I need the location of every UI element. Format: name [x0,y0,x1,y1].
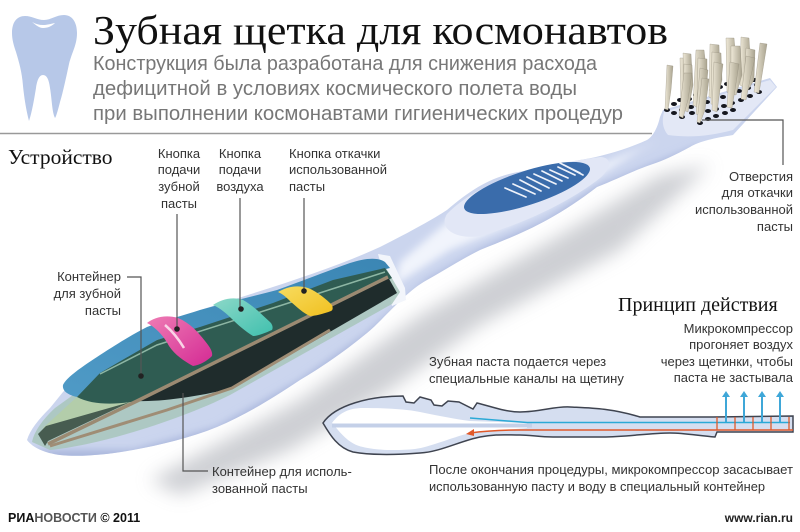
toothpaste container [77,268,392,404]
bristles [665,37,767,123]
label: waste container [212,464,352,496]
label: pump button [289,146,387,194]
cross-section diagram [323,391,793,454]
leader: air button [238,198,244,312]
blue channel [63,259,390,397]
button: pink [147,316,212,366]
leader: pump button [301,198,307,294]
label: holes [695,169,793,234]
leader: waste container [183,393,208,471]
toothbrush illustration [27,36,777,456]
leader: toothpaste button [174,214,180,332]
label: air button: воздуха [216,179,264,194]
label: waste container: зованной пасты [212,481,308,496]
label: toothpaste button: пасты [161,196,197,211]
grip pad [459,151,595,225]
label: pump button: пасты [289,179,325,194]
shadow of toothbrush [150,165,710,495]
brown tube [48,277,388,444]
label: waste container: Контейнер для исполь- [212,464,352,479]
text: microcompressor: прогоняет воздух [689,337,793,352]
subtitle: при выполнении космонавтами гигиенических процедур [93,102,623,125]
label: air button: Кнопка [219,146,262,161]
button: yellow [278,286,333,316]
red risers [717,417,789,430]
button: teal [213,298,273,336]
label: toothpaste container [54,269,121,318]
text: microcompressor: Микрокомпрессор [684,321,793,336]
text: toothpaste flow: специальные каналы на щетину [429,371,624,386]
central tube [332,424,532,428]
label: holes: пасты [757,219,793,234]
label: toothpaste container: Контейнер [57,269,121,284]
text: toothpaste flow [429,354,624,386]
text: microcompressor [661,321,794,385]
label: pump button: Кнопка откачки [289,146,380,161]
handle body [27,78,777,456]
label: toothpaste container: для зубной [54,286,121,301]
blue channel line [470,418,790,422]
label: holes: использованной [695,202,793,217]
heading: device: Устройство [8,145,113,169]
label: air button: подачи [219,162,261,177]
text: after procedure [429,462,793,494]
leader: holes [702,120,783,165]
label: air button [216,146,264,194]
label: toothpaste button [158,146,201,211]
label: toothpaste container: пасты [85,303,121,318]
text: toothpaste flow: Зубная паста подается через [429,354,606,369]
title: Зубная щетка для космонавтов [93,7,668,53]
pale container [32,268,400,450]
cavity [332,408,527,450]
grip bevel [445,157,609,237]
text: microcompressor: паста не застывала [674,370,794,385]
subtitle [93,52,623,125]
footer: logo and copyright: РИАНОВОСТИ © 2011 [8,511,140,525]
label: holes: Отверстия [729,169,793,184]
window edge [378,254,406,306]
footer: website: www.rian.ru [724,511,793,525]
leader: toothpaste container [127,277,144,379]
waste container [137,277,397,401]
text: after procedure: использованную пасту и воду в специальный контейнер [429,479,765,494]
label: toothpaste button: подачи [158,162,200,177]
bristle holes [664,78,762,125]
label: holes: для откачки [722,185,793,200]
label: pump button: использованной [289,162,387,177]
heading: how it works: Принцип действия [618,294,778,316]
label: toothpaste button: зубной [158,179,200,194]
head highlight [663,80,776,136]
text: after procedure: После окончания процедуры, микрокомпрессор засасывает [429,462,793,477]
red channel line [466,429,793,436]
icon: tooth [12,15,77,121]
label: toothpaste button: Кнопка [158,146,201,161]
subtitle: дефицитной в условиях космического полета воды [93,77,577,100]
section outline [323,396,793,454]
air arrows [722,391,784,422]
text: microcompressor: через щетинки, чтобы [661,354,793,369]
subtitle: Конструкция была разработана для снижения расхода [93,52,598,75]
